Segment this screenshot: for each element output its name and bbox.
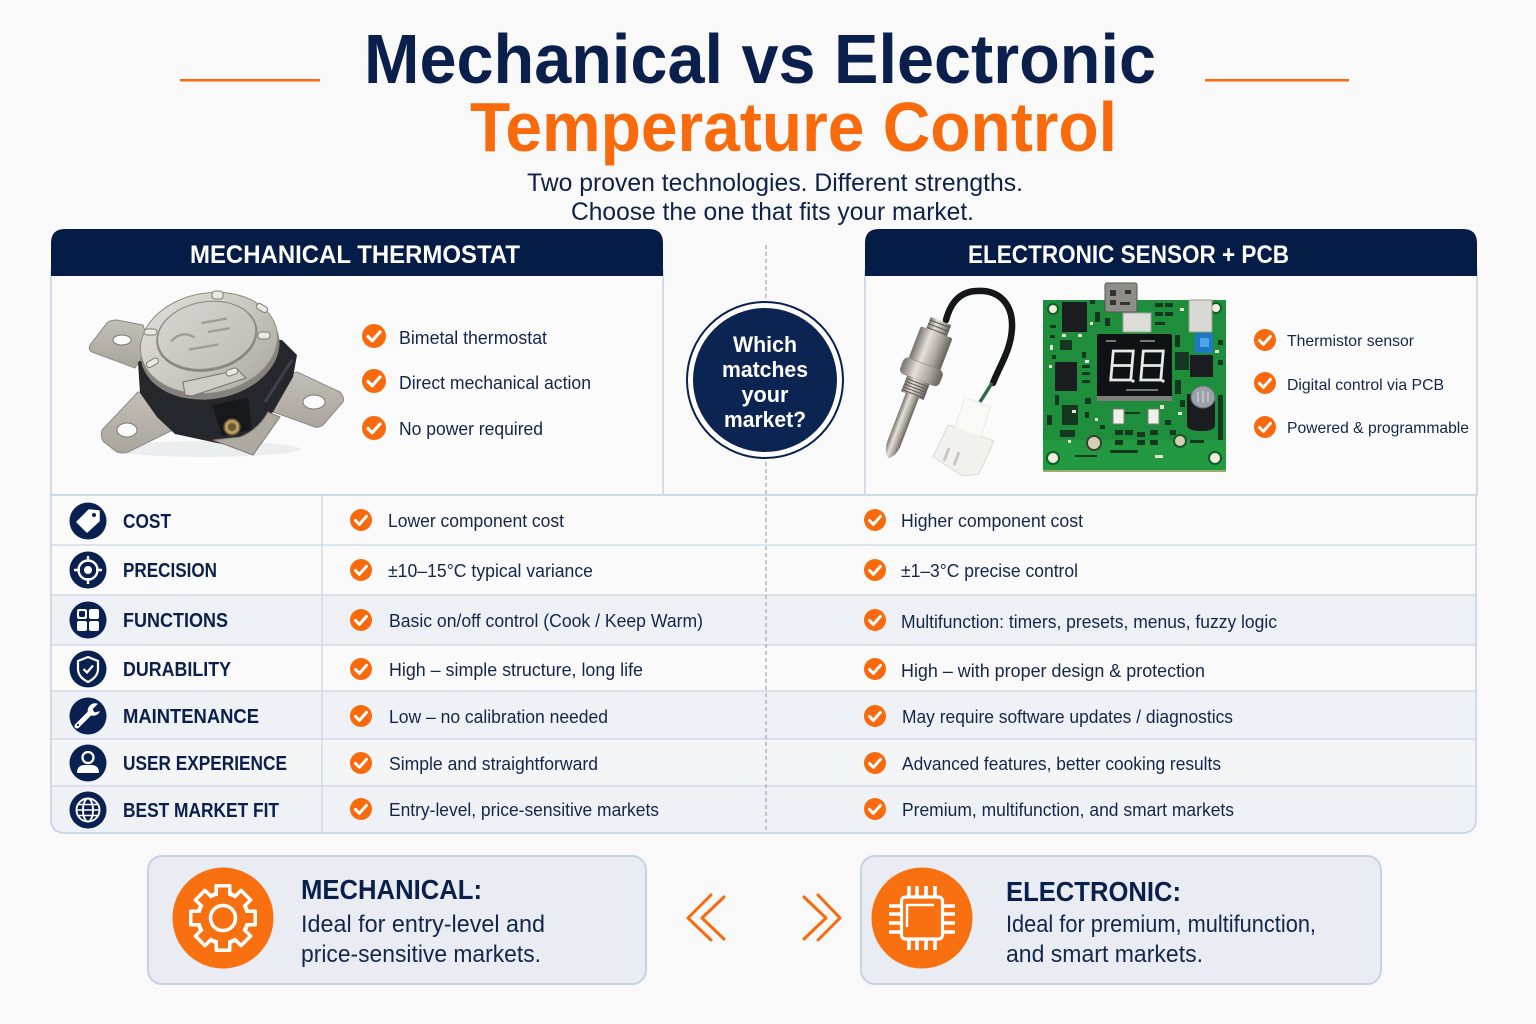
title: [364, 20, 1156, 166]
panel: mechanical thermostat: [51, 229, 663, 495]
row: precision: ±10–15°C typical variance: [388, 561, 593, 581]
title: Temperature Control: [470, 88, 1117, 166]
feature list: electronic: [1254, 329, 1469, 438]
row: best market fit: Entry-level, price-sensitive markets: [389, 800, 659, 820]
panel: electronic sensor + PCB: [865, 229, 1477, 495]
summary text: mechanical: MECHANICAL:: [301, 874, 482, 905]
row: cost: Lower component cost: [388, 511, 564, 531]
summary card: mechanical: [148, 856, 646, 984]
feature list: electronic: Thermistor sensor: [1287, 333, 1415, 350]
summary text: electronic: and smart markets.: [1006, 941, 1203, 968]
row: functions: Multifunction: timers, presets, menus, fuzzy logic: [901, 612, 1277, 632]
arrows: left chevrons: [688, 895, 724, 940]
row: functions: Basic on/off control (Cook / Keep Warm): [389, 611, 703, 631]
row: functions: [70, 602, 1277, 638]
illustration: bimetal thermostat: [89, 282, 344, 457]
row: best market fit: Premium, multifunction, and smart markets: [902, 800, 1234, 820]
row: durability: DURABILITY: [123, 659, 232, 681]
feature list: electronic: Digital control via PCB: [1287, 377, 1444, 394]
title accent line: right: [1205, 79, 1349, 82]
row: maintenance: MAINTENANCE: [123, 706, 259, 728]
row: user experience: USER EXPERIENCE: [123, 753, 287, 775]
row: cost: [70, 502, 1083, 540]
icon: wrench: [70, 698, 106, 734]
feature list: electronic: Powered & programmable: [1287, 420, 1469, 437]
row: functions: FUNCTIONS: [123, 610, 228, 632]
summary text: mechanical: [301, 874, 545, 968]
subtitle: Choose the one that fits your market.: [571, 198, 974, 226]
panel header: electronic: ELECTRONIC SENSOR + PCB: [968, 241, 1289, 269]
center badge: which matches your market: matches: [722, 357, 808, 382]
icon: shield: [70, 650, 106, 688]
panel header: mechanical: [51, 229, 663, 276]
arrows: right chevrons: [804, 895, 840, 940]
row: precision: ±1–3°C precise control: [901, 561, 1078, 581]
row: best market fit: BEST MARKET FIT: [123, 800, 279, 822]
icon: microchip: [872, 868, 972, 968]
center badge: which matches your market: market?: [724, 407, 806, 432]
center badge: which matches your market: Which: [733, 332, 797, 357]
center dashed divider: [765, 245, 767, 833]
row: durability: High – simple structure, long life: [389, 660, 643, 680]
panel header: electronic: [865, 229, 1477, 276]
row: durability: [70, 650, 1205, 688]
panel header: mechanical: MECHANICAL THERMOSTAT: [190, 241, 520, 269]
icon: function grid: [70, 602, 106, 638]
icon: user: [70, 744, 106, 782]
row: precision: [70, 552, 1078, 588]
feature list: mechanical: Bimetal thermostat: [399, 328, 547, 348]
center badge: which matches your market: [687, 302, 843, 458]
icon: globe: [70, 792, 106, 828]
feature list: mechanical: Direct mechanical action: [399, 373, 591, 393]
row: user experience: Advanced features, better cooking results: [902, 754, 1221, 774]
row: precision: PRECISION: [123, 560, 217, 582]
comparison table: [51, 495, 1476, 833]
icon: price tag: [70, 502, 106, 540]
row: maintenance: May require software updates / diagnostics: [902, 707, 1233, 727]
center badge: which matches your market: your: [742, 382, 789, 407]
feature list: mechanical: No power required: [399, 419, 543, 439]
row: maintenance: [70, 698, 1233, 734]
subtitle: Two proven technologies. Different strengths.: [527, 169, 1023, 197]
subtitle: [527, 169, 1023, 226]
illustration: PCB with display: [1043, 283, 1226, 472]
row: user experience: [70, 744, 1221, 782]
icon: gear: [172, 868, 274, 968]
summary text: mechanical: price-sensitive markets.: [301, 941, 541, 968]
title accent line: left: [180, 79, 320, 82]
row: durability: High – with proper design & protection: [901, 661, 1205, 681]
summary text: electronic: Ideal for premium, multifunction,: [1006, 911, 1316, 938]
title: Mechanical vs Electronic: [364, 20, 1156, 98]
row: cost: Higher component cost: [901, 511, 1083, 531]
summary text: electronic: [1006, 876, 1316, 968]
row: maintenance: Low – no calibration needed: [389, 707, 608, 727]
row: best market fit: [70, 792, 1234, 828]
summary card: electronic: [861, 856, 1381, 984]
illustration: thermistor probe with cable: [869, 291, 1012, 476]
icon: target: [70, 552, 106, 588]
row: user experience: Simple and straightforward: [389, 754, 598, 774]
summary text: mechanical: Ideal for entry-level and: [301, 911, 545, 938]
summary text: electronic: ELECTRONIC:: [1006, 876, 1181, 907]
feature list: mechanical: [362, 324, 591, 440]
row: cost: COST: [123, 511, 171, 533]
